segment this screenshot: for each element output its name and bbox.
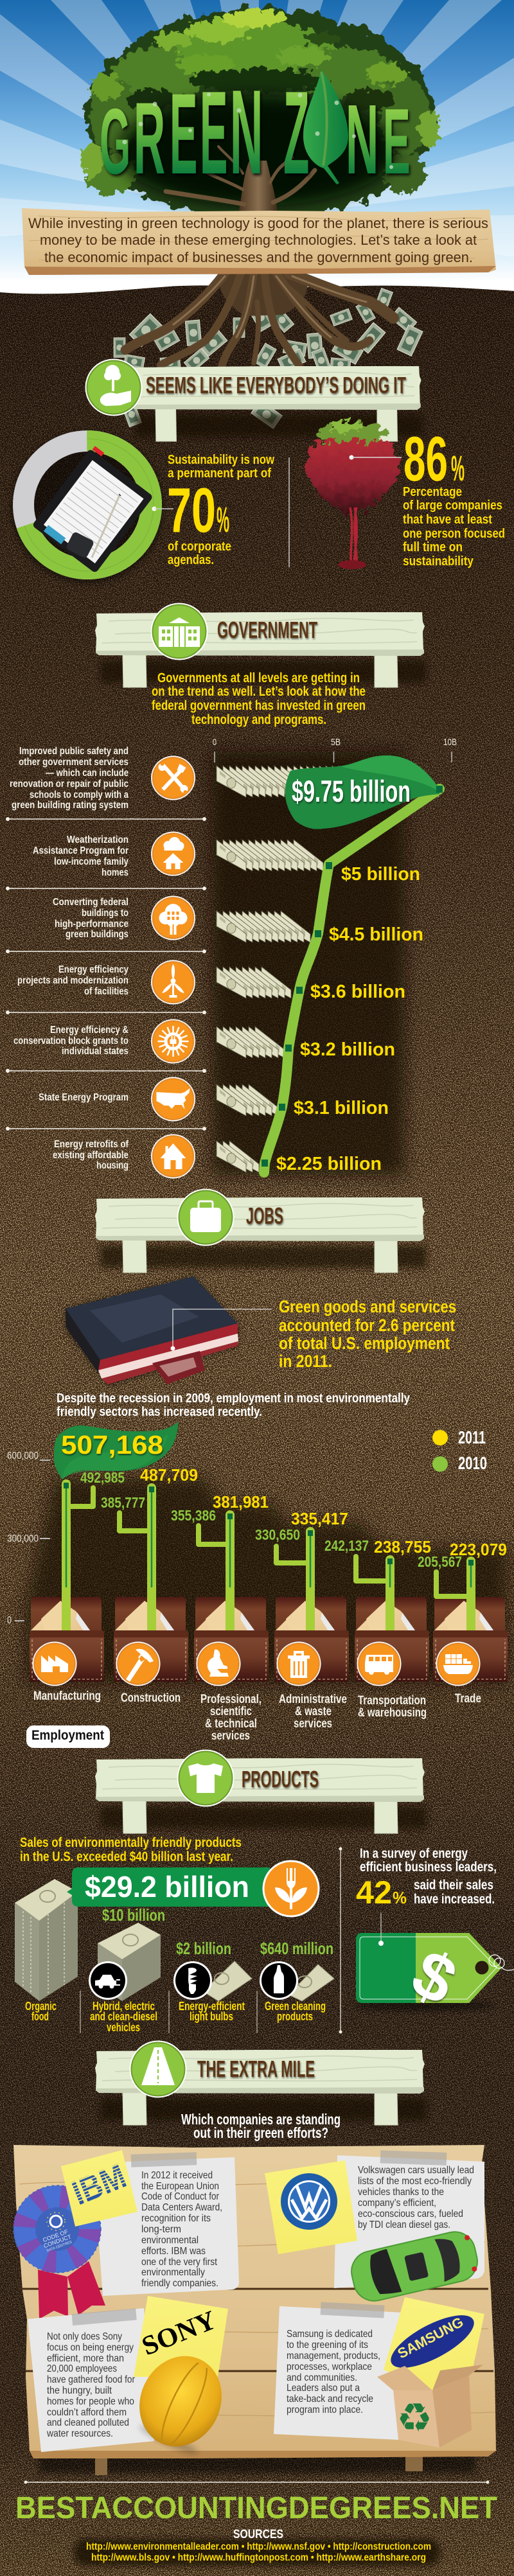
- sector labels: Administrative: [279, 1693, 347, 1706]
- title: GREEN ZONE: E: [170, 69, 197, 198]
- icon: rosette ribbon: DATA CENTRES: [46, 2240, 73, 2253]
- label: weatherization: homes: [102, 867, 128, 878]
- title: GREEN ZONE: E: [383, 89, 411, 193]
- card text: Code of Conduct for: [141, 2191, 220, 2202]
- label: federal buildings: green buildings: [66, 929, 128, 940]
- bill stacks: [217, 766, 439, 1172]
- card text: Not only does Sony: [47, 2331, 122, 2342]
- product category labels: products: [277, 2010, 313, 2023]
- label: block grants: conservation block grants to: [13, 1036, 128, 1046]
- products intro text: Sales of environmentally friendly products: [20, 1835, 242, 1850]
- label: Employment: [26, 1725, 110, 1748]
- icon: wind turbine: [151, 960, 195, 1005]
- axis labels: 300,000: [7, 1533, 39, 1544]
- banner: $29.2 billion: [67, 1860, 320, 1917]
- label: public safety: schools to comply with a: [30, 790, 128, 800]
- extra mile question: [181, 2111, 341, 2141]
- green stalk line: [264, 789, 439, 1172]
- government intro text: on the trend as well. Let’s look at how the: [152, 684, 366, 699]
- 2011 values: 487,709: [140, 1465, 198, 1485]
- card text: and cleaned polluted: [47, 2417, 129, 2428]
- icon: factory: [32, 1642, 77, 1686]
- card text: have gathered food for: [47, 2374, 136, 2385]
- icon: microscope: [197, 1642, 240, 1686]
- axis labels: 0: [7, 1615, 12, 1626]
- value labels: $4.5 billion: [329, 924, 423, 945]
- heading text: PRODUCTS: [242, 1766, 319, 1792]
- sources: http://www.bls.gov • http://www.huffingtonpost.com • http://www.earthshare.org: [91, 2552, 426, 2563]
- intro text: While investing in green technology is good for the planet, there is serious: [28, 215, 488, 231]
- donut chart: 70%: [12, 432, 173, 583]
- card text: one of the very first: [141, 2257, 217, 2268]
- icon: house: [151, 1134, 195, 1178]
- card text: [287, 2329, 380, 2415]
- icon: recycling box: ♻: [396, 2394, 432, 2441]
- card: Sony: [28, 2296, 236, 2460]
- stat text: 86%: 86: [403, 423, 448, 494]
- chart: employment by sector: [7, 1422, 508, 1683]
- sticky note: Samsung logo: SAMSUNG: [395, 2314, 466, 2361]
- title: GREEN ZONE: Z: [283, 67, 309, 199]
- illustration: green car: [348, 2228, 481, 2305]
- sector labels: Construction: [121, 1691, 181, 1705]
- 2010 values: 330,650: [255, 1526, 300, 1543]
- icon: cleaning bottle: [260, 1961, 298, 2000]
- card text: management, products,: [287, 2351, 380, 2361]
- card text: friendly companies.: [141, 2278, 218, 2289]
- icon: leaf forming the O: [122, 70, 393, 184]
- value labels: $2.25 billion: [276, 1154, 382, 1174]
- intro text: money to be made in these emerging technologies. Let’s take a look at: [40, 232, 477, 248]
- sticky note: Sony logo: SONY: [138, 2306, 220, 2361]
- sources: SOURCES: [233, 2528, 283, 2541]
- sector icons: [32, 1642, 481, 1686]
- sticky note: VW logo: [265, 2160, 357, 2254]
- icon: trash bin: [276, 1642, 321, 1686]
- stat text: 86%: full time on: [403, 540, 463, 554]
- value labels: $3.2 billion: [300, 1039, 395, 1060]
- stat text: 42%: [356, 1846, 497, 1910]
- callout text: green goods: accounted for 2.6 percent: [279, 1316, 455, 1335]
- wallet fronts: [30, 1630, 508, 1682]
- government intro text: federal government has invested in green: [152, 698, 366, 713]
- label: public safety: Improved public safety and: [19, 746, 128, 757]
- chart axis: 10B: [443, 737, 457, 748]
- card text: and communities.: [287, 2372, 357, 2383]
- government intro text: [152, 671, 366, 727]
- value labels: [276, 864, 423, 1174]
- stat text: 42%: said their sales: [414, 1878, 493, 1892]
- stat text: 86%: %: [451, 448, 465, 488]
- icon: government building: [150, 603, 208, 660]
- 2010 values: 242,137: [324, 1537, 369, 1554]
- sector labels: services: [211, 1729, 250, 1743]
- card: Volkswagen: [265, 2150, 484, 2305]
- icon: building tree: [151, 895, 195, 940]
- chart axis: 0: [213, 737, 217, 748]
- sticky note: IBM logo: IBM: [67, 2157, 131, 2212]
- legend: [432, 1427, 487, 1473]
- product category labels: light bulbs: [190, 2010, 233, 2023]
- stat text: 86%: that have at least: [403, 513, 492, 527]
- intro text: [28, 215, 488, 265]
- product category labels: Hybrid, electric: [93, 2000, 155, 2013]
- label: block grants: individual states: [62, 1046, 128, 1057]
- label: $2 billion: [176, 1939, 231, 1958]
- products intro text: in the U.S. exceeded $40 billion last year.: [20, 1849, 233, 1864]
- government intro text: technology and programs.: [191, 712, 326, 727]
- icon: fork and leaves: [262, 1860, 320, 1917]
- tree trunk and branches: [166, 146, 315, 212]
- label: energy efficiency projects: [17, 964, 128, 997]
- label: weatherization: [33, 834, 128, 878]
- card text: [46, 2331, 136, 2439]
- icon: green price tag: $: [401, 1936, 468, 2019]
- extra mile question: out in their green efforts?: [193, 2124, 328, 2141]
- heading text: GOVERNMENT: [217, 617, 317, 643]
- label: block grants: [13, 1025, 128, 1057]
- label: federal buildings: [53, 897, 128, 940]
- products intro text: [20, 1835, 242, 1864]
- icon: bus: [357, 1642, 401, 1686]
- sector labels: Professional,: [200, 1693, 261, 1706]
- card text: by TDI clean diesel gas.: [358, 2219, 450, 2230]
- card text: [141, 2170, 222, 2289]
- stat text: 70% of corporate agendas: 70: [167, 475, 216, 545]
- banner: $29.2 billion: $29.2 billion: [85, 1870, 249, 1903]
- stalk nodes: [261, 786, 443, 1167]
- card text: vehicles thanks to the: [358, 2187, 444, 2198]
- 2011 values: 381,981: [213, 1492, 269, 1512]
- heading sign: The extra mile: [95, 2040, 427, 2125]
- sticky note: Sony logo: [134, 2296, 228, 2377]
- illustration: briefcase: [66, 1276, 272, 1386]
- icon: notebook and pen: [32, 445, 157, 574]
- card text: eco-conscious cars, fueled: [358, 2209, 463, 2219]
- footer title: BESTACCOUNTINGDEGREES.NET: [15, 2491, 497, 2525]
- card text: to the greening of its: [287, 2340, 368, 2351]
- leaf flag: 507,168: [54, 1422, 178, 1479]
- label: energy retrofits: existing affordable: [53, 1150, 128, 1161]
- stalks 2011 and 2010: [66, 1484, 471, 1635]
- sector labels: Trade: [455, 1692, 481, 1706]
- 2011 values: 238,755: [374, 1537, 431, 1557]
- card text: environmentally: [141, 2267, 205, 2278]
- label: weatherization: Assistance Program for: [33, 845, 128, 856]
- icon: electric car: [89, 1961, 127, 2000]
- icon: recycling box: [377, 2365, 483, 2448]
- 2011 values: 335,417: [291, 1509, 348, 1528]
- icon: rosette ribbon: CODE OF: [42, 2228, 69, 2243]
- title: GREEN ZONE: N: [230, 65, 263, 199]
- 2010 values: 492,985: [80, 1469, 125, 1486]
- card text: processes, workplace: [287, 2361, 372, 2372]
- stat text: 86%: sustainability: [403, 554, 474, 569]
- product category labels: Organic: [25, 2000, 57, 2013]
- employment intro text: friendly sectors has increased recently.: [57, 1405, 262, 1419]
- heading text: JOBS: [246, 1203, 283, 1229]
- sector labels: services: [294, 1717, 332, 1731]
- sources: [74, 2528, 440, 2566]
- icon: rosette ribbon: CONDUCT: [42, 2233, 73, 2249]
- card text: the European Union: [141, 2181, 219, 2192]
- label: federal buildings: high-performance: [55, 919, 128, 930]
- leaf callout: $9.75 billion: [285, 755, 439, 829]
- leaf callout: $9.75 billion: $9.75 billion: [292, 774, 411, 808]
- card text: [358, 2165, 474, 2230]
- money stack: hybrid vehicles: [89, 1905, 165, 2001]
- stat text: 70% of corporate agendas: %: [217, 499, 229, 540]
- government intro text: Governments at all levels are getting in: [157, 671, 360, 685]
- card text: couldn’t afford them: [47, 2407, 127, 2418]
- axis labels: 600,000: [7, 1451, 39, 1461]
- card text: program into place.: [287, 2404, 363, 2415]
- value labels: $3.1 billion: [294, 1098, 389, 1118]
- panel: wooden notice board: [13, 2145, 496, 2475]
- sources: http://www.environmentalleader.com • http://www.nsf.gov • http://construction.com: [86, 2541, 431, 2552]
- label: public safety: green building rating system: [12, 800, 128, 811]
- row labels: government programs: [10, 746, 195, 1178]
- 2010 values: [80, 1469, 462, 1570]
- tree canopy: [82, 8, 439, 220]
- icon: sun with plug: [151, 1019, 195, 1064]
- callout text: green goods: [279, 1297, 456, 1371]
- stat text: 86%: [403, 423, 505, 569]
- card text: environmental: [141, 2235, 199, 2246]
- product category labels: vehicles: [107, 2021, 140, 2034]
- label: energy retrofits: Energy retrofits of: [54, 1139, 129, 1150]
- 2010 values: 385,777: [101, 1494, 145, 1511]
- icon: cloud and house: [151, 831, 195, 876]
- icon: rosette ribbon: [13, 2185, 105, 2319]
- title: GREEN ZONE: [100, 65, 411, 199]
- money stack: organic food: [15, 1879, 78, 2001]
- heading sign: Government: [95, 603, 427, 687]
- card text: efforts. IBM was: [141, 2246, 206, 2257]
- callout text: green goods: Green goods and services: [279, 1297, 456, 1316]
- label: energy retrofits: housing: [96, 1160, 128, 1171]
- panel: intro plank: [22, 208, 496, 275]
- label: $640 million: [260, 1939, 333, 1958]
- sector labels: scientific: [210, 1705, 252, 1718]
- money: cleaning products: [260, 1939, 334, 2001]
- 2010 values: 355,386: [171, 1507, 216, 1524]
- stat text: 70% of corporate agendas: Sustainability is now: [168, 453, 274, 467]
- extra mile question: Which companies are standing: [181, 2111, 341, 2128]
- card text: 20,000 employees: [47, 2363, 117, 2374]
- label: $10 billion: [102, 1905, 165, 1925]
- value labels: $3.6 billion: [310, 982, 405, 1002]
- sector labels: Transportation: [358, 1694, 426, 1707]
- label: public safety: renovation or repair of public: [10, 779, 128, 790]
- card text: the hungry, built: [47, 2385, 112, 2396]
- stat text: 70% of corporate agendas: [167, 453, 274, 567]
- icon: yellow hard hat: [125, 2343, 236, 2460]
- icon: cargo ship: [436, 1642, 481, 1686]
- icon: map of USA: [151, 1077, 195, 1122]
- sector labels: & warehousing: [358, 1706, 427, 1720]
- leaf flag: 507,168: 507,168: [61, 1430, 163, 1460]
- card: IBM: [13, 2150, 239, 2319]
- callout text: green goods: of total U.S. employment: [279, 1334, 450, 1353]
- sector labels: & technical: [205, 1717, 257, 1731]
- icon: light bulb: [173, 1961, 212, 2000]
- employment intro text: [57, 1391, 411, 1419]
- label: weatherization: Weatherization: [67, 834, 128, 845]
- card text: take-back and recycle: [287, 2394, 373, 2404]
- label: public safety: — which can include: [46, 768, 128, 779]
- label: energy retrofits: [53, 1139, 129, 1171]
- stat text: 70% of corporate agendas: agendas.: [168, 553, 214, 567]
- card text: company’s efficient,: [358, 2198, 436, 2209]
- label: federal buildings: buildings to: [82, 908, 128, 919]
- axis labels: [7, 1451, 50, 1626]
- footer divider: [24, 2481, 490, 2483]
- stat text: 70% of corporate agendas: a permanent part of: [168, 466, 271, 481]
- heading sign: Products: [95, 1750, 427, 1833]
- card text: lists of the most eco-friendly: [358, 2176, 472, 2187]
- stat text: 42%: 42: [356, 1875, 392, 1910]
- card text: Data Centers Award,: [141, 2202, 222, 2213]
- stat text: 86%: Percentage: [403, 485, 462, 499]
- label: block grants: Energy efficiency &: [50, 1025, 128, 1036]
- chart axis: 5B: [331, 737, 341, 748]
- card text: focus on being energy: [47, 2342, 134, 2353]
- card: Samsung: [274, 2297, 484, 2448]
- wallet backs: [30, 1597, 505, 1637]
- callout line: [173, 1309, 272, 1348]
- product category labels: and clean-diesel: [90, 2010, 157, 2023]
- card text: recognition for its: [141, 2213, 211, 2224]
- icon: red and green tree: [303, 421, 402, 569]
- dollar bills among the roots: [114, 288, 423, 428]
- card text: efficient, more than: [47, 2353, 124, 2364]
- icon: t-shirt: [177, 1750, 234, 1806]
- product category labels: food: [31, 2010, 49, 2023]
- product category labels: [25, 2000, 326, 2034]
- callout text: green goods: in 2011.: [279, 1352, 332, 1371]
- 2010 values: 205,567: [418, 1553, 462, 1570]
- label: energy efficiency projects: of facilities: [84, 986, 128, 997]
- label: weatherization: low-income family: [54, 856, 128, 867]
- title: GREEN ZONE: E: [200, 67, 227, 199]
- title: GREEN ZONE: R: [134, 81, 165, 195]
- label: federal buildings: Converting federal: [53, 897, 128, 908]
- 2011 values: [140, 1465, 507, 1559]
- legend: 2010: [458, 1453, 487, 1473]
- card text: water resources.: [46, 2428, 113, 2439]
- heading text: THE EXTRA MILE: [197, 2056, 315, 2082]
- value labels: $5 billion: [341, 864, 420, 885]
- sky with sun rays: [0, 0, 514, 294]
- product category labels: Energy-efficient: [179, 2000, 245, 2013]
- card text: Volkswagen cars usually lead: [358, 2165, 474, 2176]
- icon: tree in hand: [85, 358, 143, 416]
- sector labels: & waste: [295, 1705, 332, 1718]
- title: GREEN ZONE: N: [346, 84, 378, 195]
- stat text: 42%: In a survey of energy: [360, 1846, 468, 1861]
- roots: [125, 273, 393, 366]
- stat text: 42%: %: [393, 1888, 407, 1907]
- icon: briefcase: [177, 1188, 234, 1246]
- icon: hammer: [116, 1642, 161, 1686]
- stat text: 42%: have increased.: [414, 1892, 495, 1907]
- money: light bulbs: [173, 1939, 252, 2001]
- heading sign: Seems like everybody's doing it: [85, 358, 423, 441]
- legend: 2011: [458, 1427, 486, 1447]
- label: Employment: Employment: [31, 1728, 104, 1743]
- sticky note: Samsung logo: [384, 2297, 484, 2393]
- employment intro text: Despite the recession in 2009, employment in most environmentally: [57, 1391, 411, 1406]
- label: public safety: other government services: [19, 757, 128, 768]
- title: GREEN ZONE: G: [100, 89, 130, 193]
- heading sign: Jobs: [95, 1188, 427, 1273]
- card text: Leaders also put a: [287, 2383, 360, 2394]
- label: energy efficiency projects: Energy efficiency: [58, 964, 128, 975]
- stat text: 70% of corporate agendas: of corporate: [168, 540, 231, 554]
- intro text: the economic impact of businesses and the government going green.: [44, 249, 473, 265]
- product category labels: Green cleaning: [265, 2000, 326, 2013]
- 2011 values: 223,079: [450, 1540, 507, 1559]
- icon: road: [130, 2040, 186, 2098]
- label: state energy: State Energy Program: [39, 1092, 128, 1103]
- icon: green price tag: [353, 1913, 514, 2019]
- icon: tools: [151, 755, 195, 800]
- card text: homes for people who: [47, 2396, 134, 2407]
- chart: government investment: [212, 737, 457, 1176]
- sector labels: [33, 1689, 481, 1743]
- chart axis: [213, 737, 457, 763]
- label: energy efficiency projects: projects and modernization: [17, 975, 128, 986]
- card text: long-term: [141, 2224, 181, 2235]
- label: public safety: [10, 746, 128, 811]
- sector labels: Manufacturing: [33, 1689, 101, 1703]
- card text: Samsung is dedicated: [287, 2329, 373, 2340]
- card text: In 2012 it received: [141, 2170, 213, 2181]
